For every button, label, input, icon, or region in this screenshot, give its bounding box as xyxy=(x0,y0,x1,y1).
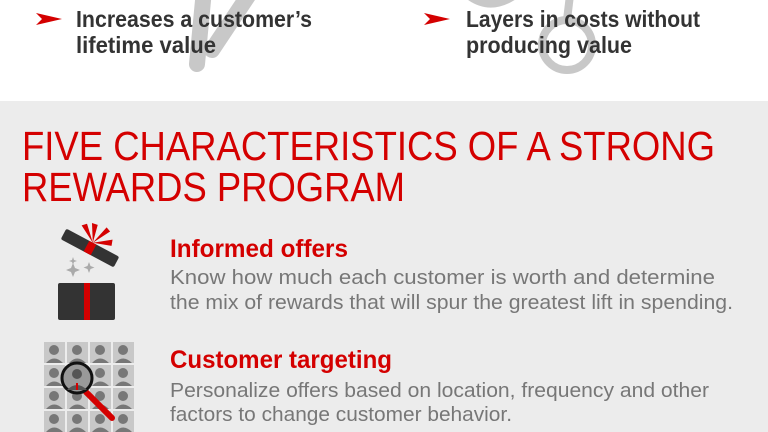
icon: gift box xyxy=(58,211,129,320)
text: informed offers body: the mix of rewards that will spur the greatest lift in spending. xyxy=(170,292,733,314)
text: informed offers body: Know how much each customer is worth and determine xyxy=(170,267,715,289)
title: REWARDS PROGRAM xyxy=(22,164,405,210)
text: layers in costs: Layers in costs without xyxy=(466,6,700,32)
heading: informed offers: Informed offers xyxy=(170,235,348,263)
icon: red arrow right xyxy=(424,13,450,25)
text: increases lifetime value: Increases a customer’s xyxy=(76,6,312,32)
icon: people grid with magnifier xyxy=(44,342,134,432)
title xyxy=(22,123,715,210)
bullet left xyxy=(36,6,312,58)
bullet right: producing value xyxy=(466,32,632,58)
text: informed offers body xyxy=(170,267,733,314)
text: customer targeting body: Personalize offers based on location, frequency and other xyxy=(170,380,709,402)
icon: red arrow xyxy=(36,13,62,25)
panel: top white xyxy=(0,0,768,101)
text: customer targeting body: factors to change customer behavior. xyxy=(170,404,512,426)
icon: grey scissors right xyxy=(468,0,592,70)
panel: characteristics xyxy=(0,101,768,432)
bullet right xyxy=(424,6,700,58)
bullet left: lifetime value xyxy=(76,32,216,58)
text: customer targeting body xyxy=(170,380,709,426)
heading: customer targeting: Customer targeting xyxy=(170,346,392,374)
icon: grey tool shape left xyxy=(197,0,252,64)
